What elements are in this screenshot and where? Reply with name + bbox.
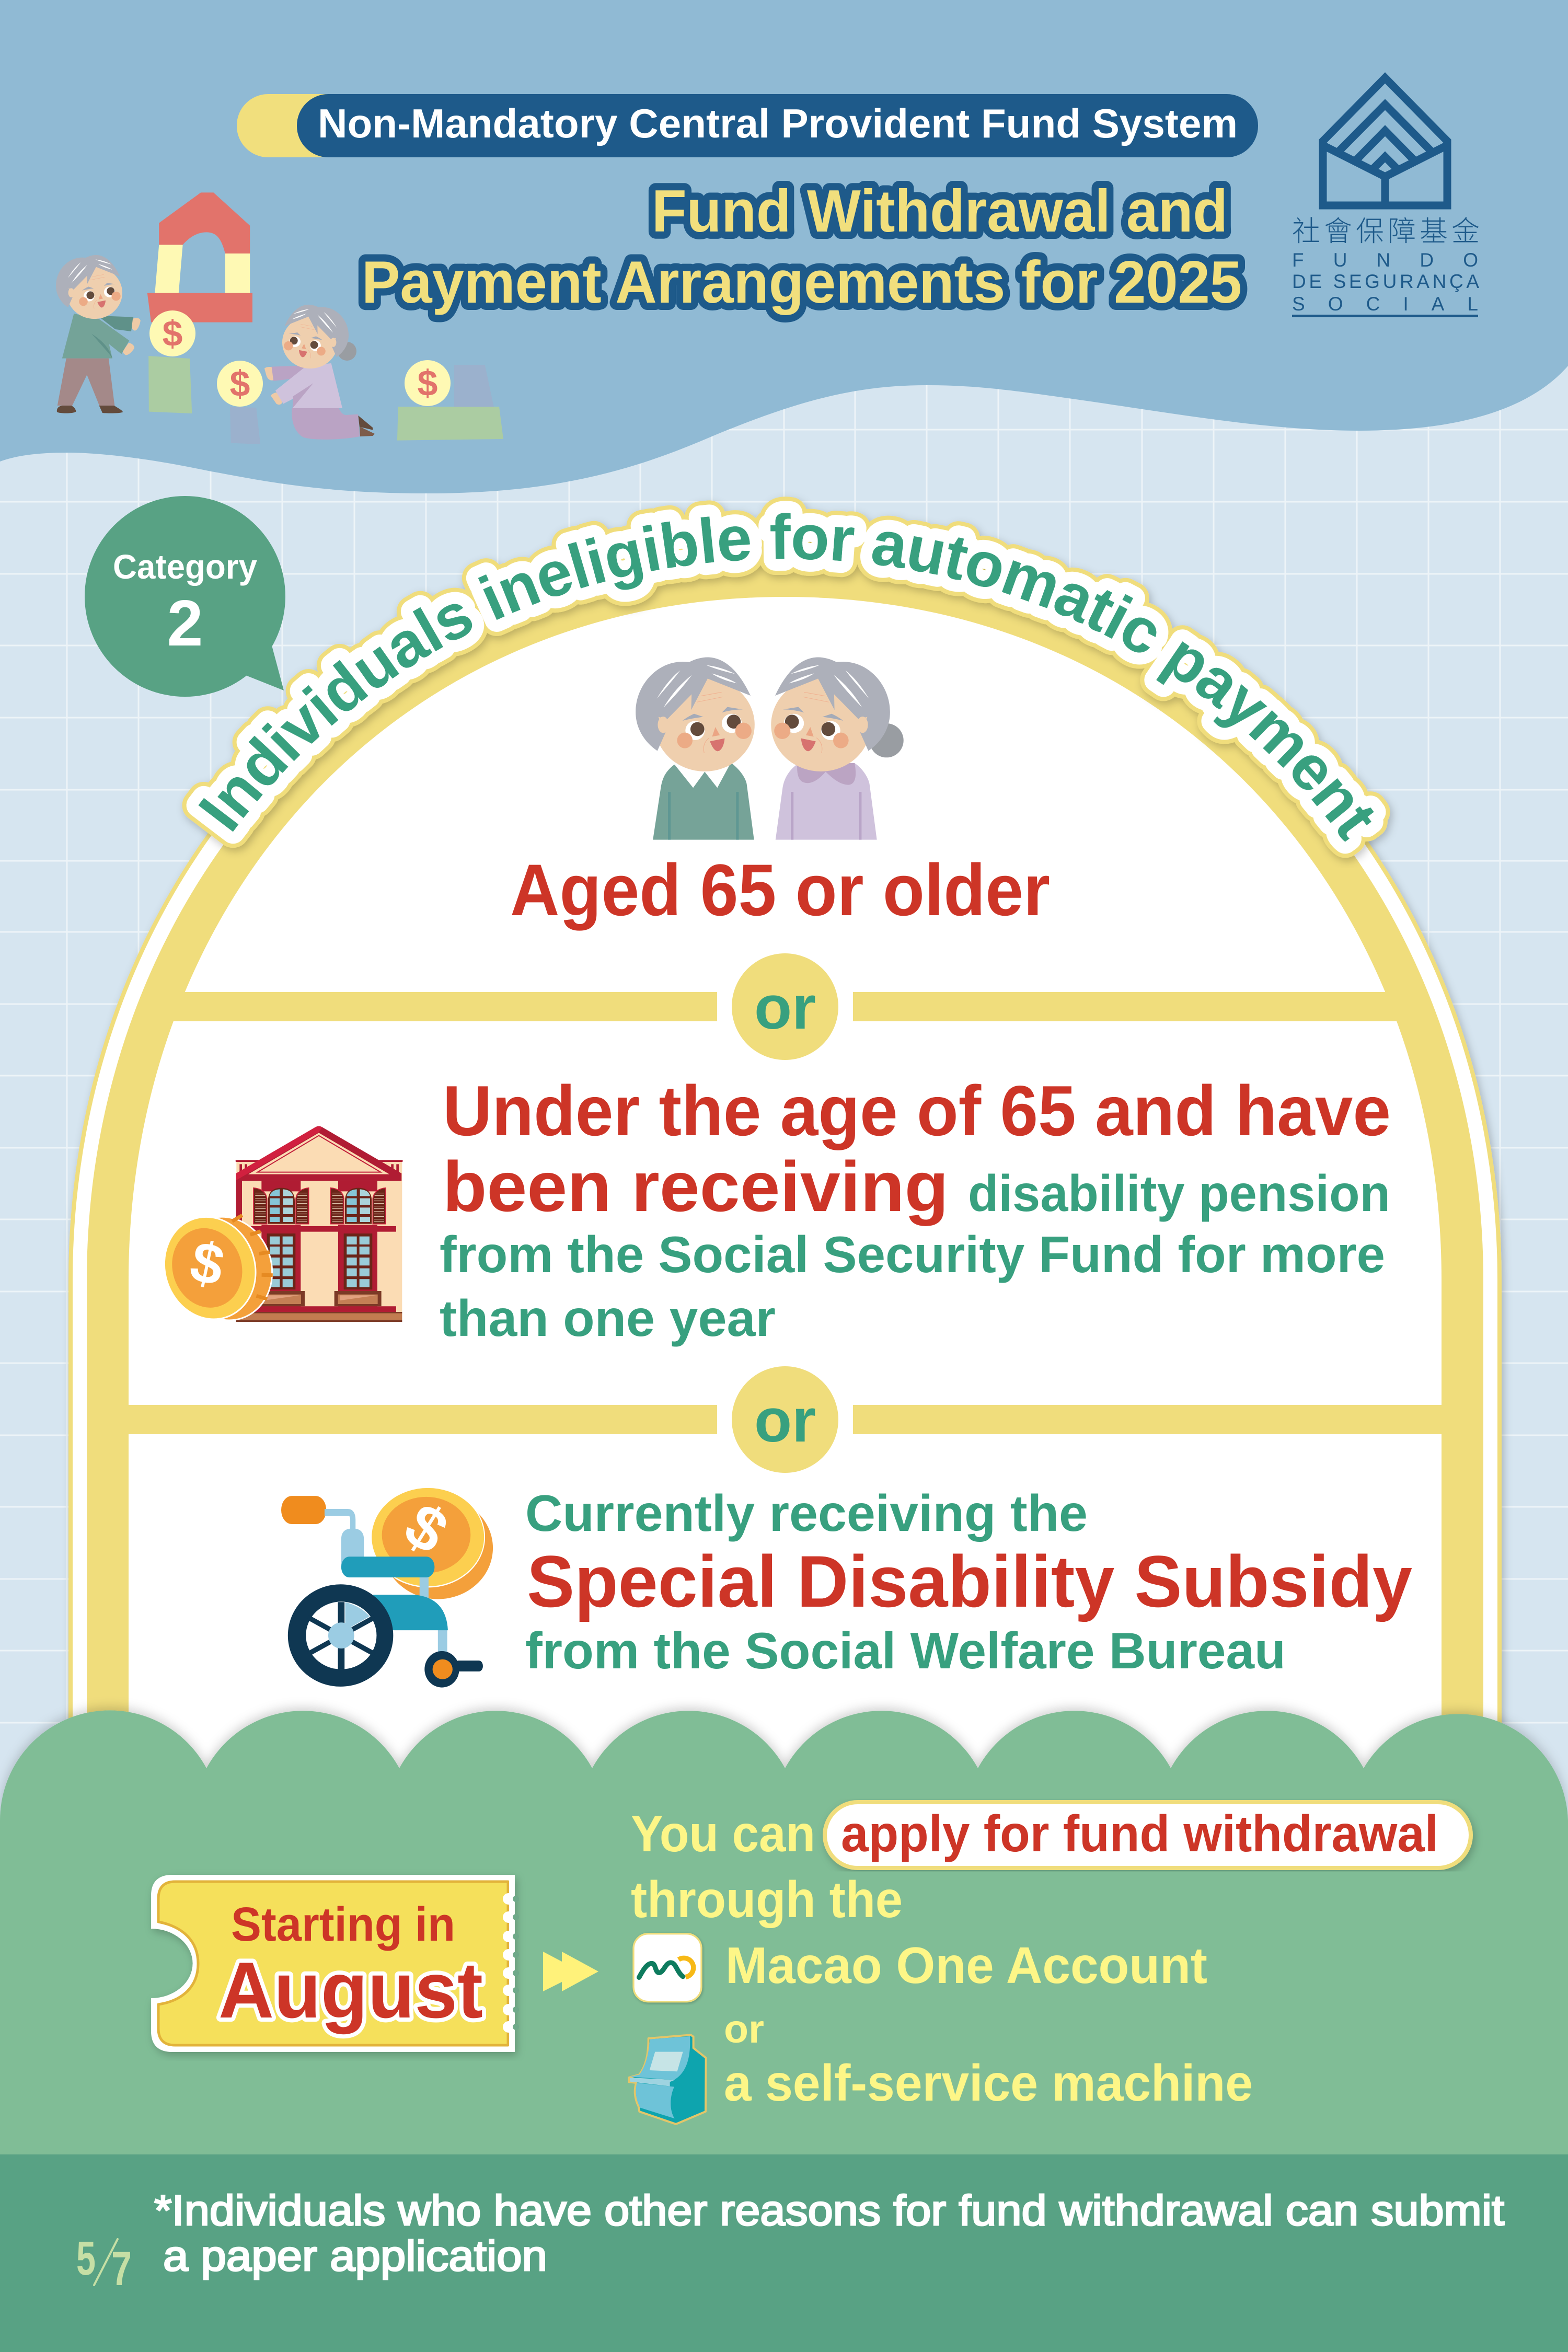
page number 5/7: 5 bbox=[76, 2232, 96, 2285]
application text block: or bbox=[724, 2007, 764, 2051]
text: Currently receiving the Special Disability Subsidy from the Social Welfare Bureau bbox=[525, 1484, 1412, 1679]
scalloped green cloud panel bbox=[0, 1710, 1568, 2195]
or divider 2 bbox=[129, 1366, 1442, 1473]
text: Currently receiving the Special Disability Subsidy from the Social Welfare Bureau: Special Disability Subsidy bbox=[527, 1540, 1412, 1622]
illustration: elderly couple with building blocks: $ bbox=[163, 313, 182, 354]
category badge bbox=[85, 496, 285, 697]
illustration: elderly couple with building blocks: $ bbox=[418, 363, 437, 403]
icon: wheelchair with coin: $ bbox=[393, 1490, 459, 1567]
main arch panel bbox=[71, 541, 1500, 1777]
main title: Fund Withdrawal and bbox=[652, 178, 1228, 245]
illustration: elderly couple with building blocks: $ bbox=[230, 363, 250, 404]
ticket: Starting in August: August bbox=[218, 1946, 483, 2035]
main title: Payment Arrangements for 2025 bbox=[362, 249, 1242, 316]
footnote bbox=[154, 2187, 1504, 2280]
text: Under the age of 65 and have been receiving disability pension from the Social Security Fund for more than one year: Under the age of 65 and have bbox=[443, 1071, 1391, 1150]
page number 5/7: 7 bbox=[111, 2242, 132, 2296]
text: Currently receiving the Special Disability Subsidy from the Social Welfare Bureau: Currently receiving the bbox=[525, 1484, 1088, 1542]
text: Under the age of 65 and have been receiving disability pension from the Social Security Fund for more than one year: than one year bbox=[440, 1289, 776, 1347]
main title bbox=[362, 178, 1242, 316]
icon: wheelchair with coin bbox=[281, 1488, 493, 1688]
footnote: *Individuals who have other reasons for fund withdrawal can submit bbox=[154, 2187, 1504, 2234]
application text block: You can bbox=[631, 1805, 815, 1862]
curved heading: Individuals ineligible for automatic payment: Individuals ineligible for automatic payment bbox=[181, 497, 1396, 864]
icon: elderly couple portrait bbox=[636, 657, 904, 840]
logo: Fundo de Segurança Social: SOCIAL bbox=[1292, 293, 1478, 315]
application text block: through the bbox=[631, 1871, 903, 1928]
pill: apply for fund withdrawal: apply for fund withdrawal bbox=[841, 1805, 1438, 1862]
text: Under the age of 65 and have been receiving disability pension from the Social Security Fund for more than one year bbox=[440, 1071, 1391, 1347]
icon: self-service machine bbox=[629, 2035, 706, 2124]
page number 5/7 bbox=[76, 2232, 132, 2296]
header pill: Non-Mandatory Central Provident Fund System bbox=[237, 94, 1258, 157]
icon: Macao One Account bbox=[633, 1934, 701, 2002]
or divider 1 bbox=[157, 953, 1413, 1060]
text: Under the age of 65 and have been receiving disability pension from the Social Security Fund for more than one year: been receiving bbox=[443, 1147, 949, 1226]
ticket: Starting in August: Starting in bbox=[231, 1898, 455, 1951]
ticket: Starting in August bbox=[151, 1875, 519, 2052]
logo: Fundo de Segurança Social: DE SEGURANÇA bbox=[1292, 271, 1479, 292]
text: Under the age of 65 and have been receiving disability pension from the Social Security Fund for more than one year: disability pension bbox=[968, 1165, 1390, 1222]
footnote: a paper application bbox=[163, 2232, 547, 2280]
header pill: Non-Mandatory Central Provident Fund System: Non-Mandatory Central Provident Fund System bbox=[318, 100, 1238, 146]
category badge: Category bbox=[113, 547, 257, 586]
application text block: a self-service machine bbox=[724, 2054, 1253, 2112]
category badge: 2 bbox=[167, 587, 203, 660]
curved heading: Individuals ineligible for automatic payment: Individuals ineligible for automatic payment bbox=[186, 501, 1386, 854]
or divider 2: or bbox=[754, 1386, 816, 1455]
illustration: elderly couple with building blocks bbox=[56, 192, 503, 444]
footer band bbox=[0, 2154, 1568, 2352]
logo: Fundo de Segurança Social: FUNDO bbox=[1292, 249, 1478, 271]
or divider 1: or bbox=[754, 973, 816, 1042]
icon: building with coin bbox=[151, 1126, 403, 1336]
header wave panel bbox=[0, 0, 1568, 493]
text: Under the age of 65 and have been receiving disability pension from the Social Security Fund for more than one year: from the Social Security Fund for more bbox=[440, 1226, 1385, 1283]
logo: Fundo de Segurança Social: 社會保障基金 bbox=[1292, 208, 1483, 249]
curved heading: Individuals ineligible for automatic payment: Individuals ineligible for automatic payment bbox=[199, 513, 1374, 841]
text: Aged 65 or older: Aged 65 or older bbox=[510, 849, 1050, 931]
logo: Fundo de Segurança Social bbox=[1292, 78, 1483, 317]
text: Currently receiving the Special Disability Subsidy from the Social Welfare Bureau: from the Social Welfare Bureau bbox=[525, 1622, 1286, 1679]
application text block: Macao One Account bbox=[725, 1936, 1207, 1994]
icon: building with coin: $ bbox=[185, 1229, 229, 1298]
arrow bbox=[543, 1952, 598, 1991]
application text block bbox=[631, 1802, 1471, 2112]
